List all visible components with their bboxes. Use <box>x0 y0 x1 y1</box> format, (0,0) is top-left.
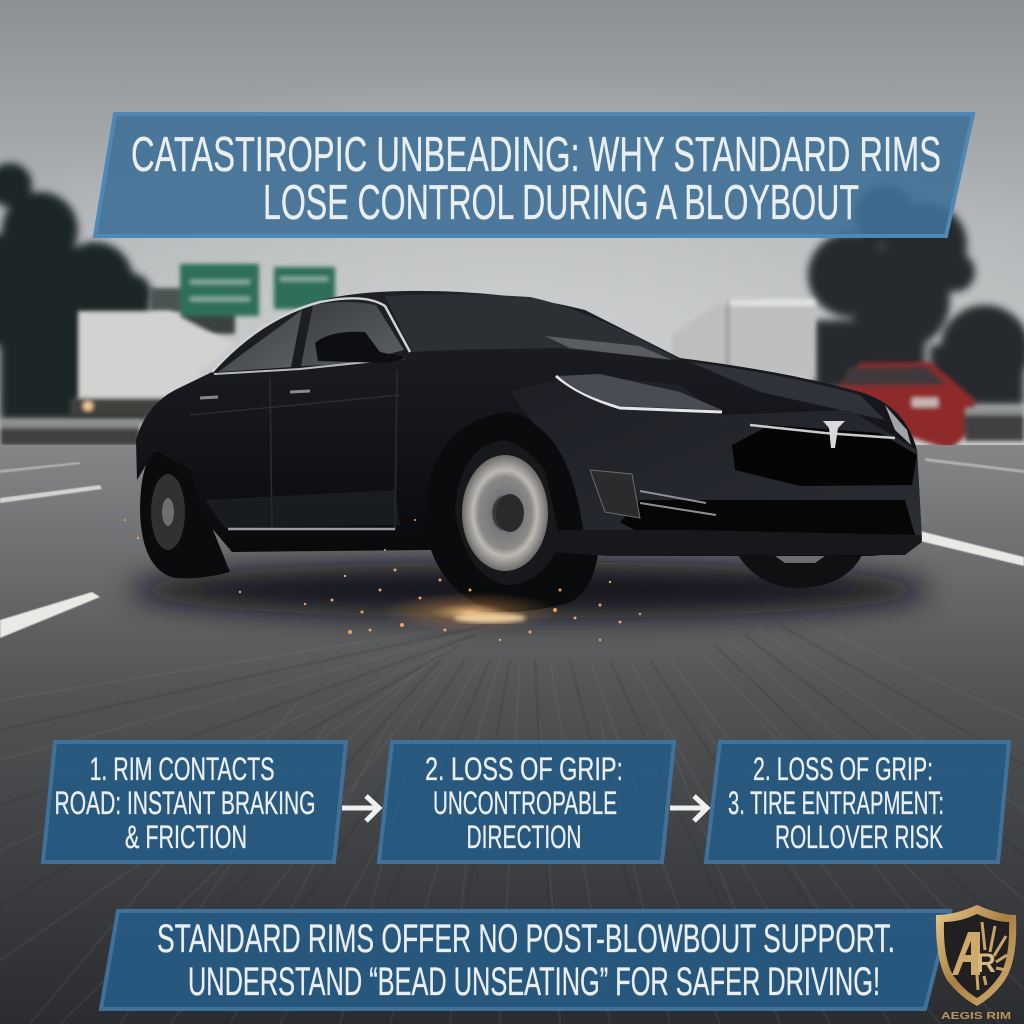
lower intake <box>620 500 915 535</box>
step 1 box: & FRICTION <box>125 819 247 855</box>
logo rays <box>977 922 1007 990</box>
step 1 box: ROAD: INSTANT BRAKING <box>54 785 316 821</box>
background: trees left <box>0 163 152 420</box>
logo wordmark: AEGIS RIM <box>941 1011 1011 1022</box>
headlight <box>556 376 722 412</box>
background: overcast sky <box>0 0 1024 450</box>
car <box>136 291 922 611</box>
front lip <box>550 530 922 556</box>
step 2 box: DIRECTION <box>466 819 582 855</box>
background: trees right <box>808 185 1024 405</box>
car shadow <box>130 562 930 618</box>
rear wheel <box>140 445 230 578</box>
background: guard rail <box>0 407 1024 446</box>
logo letter A <box>952 932 980 975</box>
mirror <box>315 332 408 363</box>
step 3 box <box>706 742 1009 862</box>
road surface <box>0 445 1024 1024</box>
road motion streaks <box>0 620 1024 1024</box>
background: red car <box>838 362 975 450</box>
tesla logo <box>823 421 845 448</box>
right headlight <box>885 405 911 445</box>
sill <box>205 490 400 528</box>
logo letter R: R <box>976 948 996 978</box>
step 2 box <box>379 742 674 862</box>
sparks <box>124 519 641 641</box>
logo: Aegis Rim shield <box>936 905 1016 1022</box>
front wheel <box>425 412 598 611</box>
fog lamp <box>590 470 640 518</box>
front fender and bumper <box>510 379 922 556</box>
arrow 1 <box>342 796 379 821</box>
car body <box>136 291 922 556</box>
background: white truck left <box>70 311 235 416</box>
step 1 box: 1. RIM CONTACTS <box>90 751 274 787</box>
step 2 box: UNCONTROPABLE <box>433 785 617 821</box>
door line <box>190 370 400 530</box>
chrome window trim <box>212 298 410 372</box>
sill trim <box>228 528 395 530</box>
hood highlight <box>690 362 885 420</box>
background: white truck right <box>672 299 815 378</box>
step 3 box: 2. LOSS OF GRIP: <box>753 751 933 787</box>
title text <box>131 128 941 230</box>
front far wheel <box>735 550 862 588</box>
lane markings <box>0 458 1024 638</box>
arrow 2 <box>670 796 707 821</box>
windows side <box>218 310 302 372</box>
title banner <box>95 114 973 236</box>
step 1 box <box>43 742 346 862</box>
step 2 box: 2. LOSS OF GRIP: <box>425 751 623 787</box>
background: green highway signs <box>150 264 335 334</box>
grille <box>732 425 917 486</box>
bottom banner <box>101 911 950 1009</box>
door handles <box>200 391 310 398</box>
windshield <box>385 294 680 360</box>
